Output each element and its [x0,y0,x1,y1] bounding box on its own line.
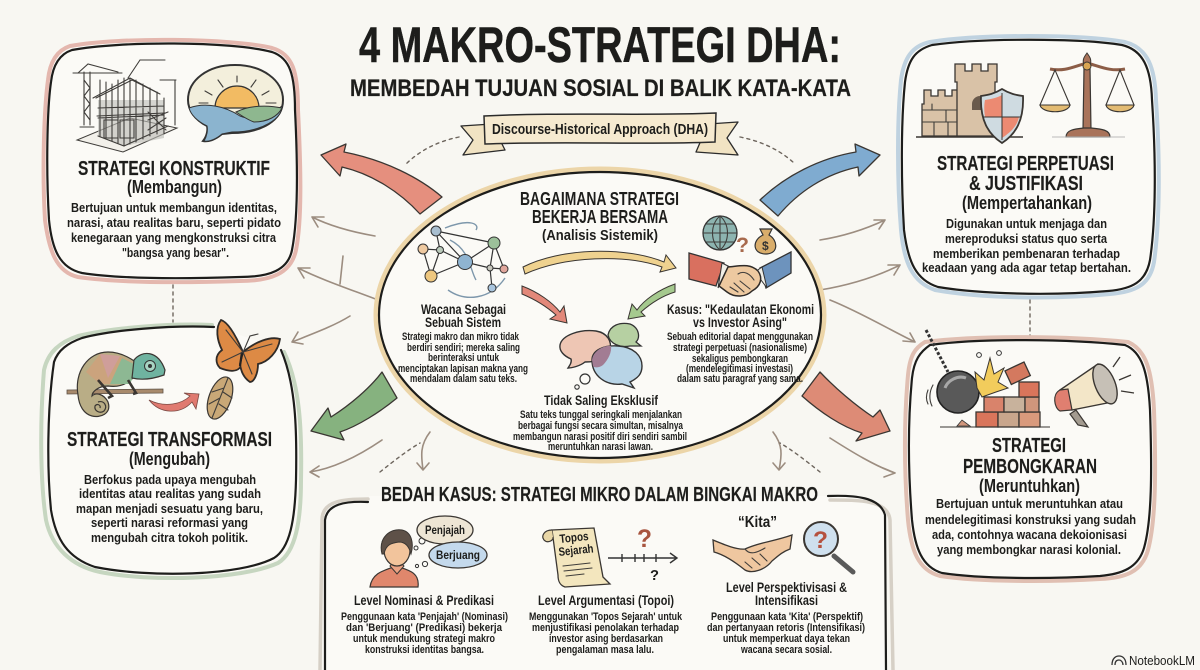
title: 4 MAKRO-STRATEGI DHA: [359,17,841,73]
icon: timeline with question marks: ? [637,525,652,553]
text: Level Nominasi dan Predikasi [341,592,508,656]
icon: chameleon on a branch [67,352,165,416]
heading: Strategi Perpetuasi: (Mempertahankan) [962,193,1092,213]
text: Tidak Saling Eksklusif [513,392,687,453]
icon: timeline with question marks: ? [650,567,659,584]
icon: wrecking ball [926,330,979,413]
text: Tidak Saling Eksklusif: membangun narasi positif diri sendiri sambil [513,431,687,443]
banner: Discourse-Historical Approach [461,113,738,155]
text: Pembongkaran description: mendelegitimasi konstruksi yang sudah [925,512,1136,527]
text: Level Perspektivisasi dan Intensifikasi: Level Perspektivisasi & [726,579,847,595]
icon: castle with shield [916,64,1023,143]
heading: Strategi Perpetuasi: STRATEGI PERPETUASI [937,153,1114,175]
icon: magnifier with question mark: ? [813,527,828,554]
text: Kasus Kedaulatan Ekonomi: Sebuah editorial dapat menggunakan [667,331,813,343]
heading: Strategi Konstruktif: (Membangun) [127,177,222,197]
icon: handshake over business cuffs [689,252,791,296]
heading: Strategi Transformasi: STRATEGI TRANSFORMASI [67,429,272,451]
icon: speech bubble with sunrise [188,65,283,141]
arrow: red to bubbles [522,286,567,323]
text: Perpetuasi description: memberikan pembenaran terhadap [933,246,1120,261]
text: Konstruktif description: narasi, atau realitas baru, seperti pidato [67,215,281,230]
title: MEMBEDAH TUJUAN SOSIAL DI BALIK KATA-KATA [350,75,851,102]
text: Level Argumentasi: menjustifikasi penolakan terhadap [532,622,679,634]
text: Level Nominasi dan Predikasi: dan 'Berjuang' (Predikasi) bekerja [346,622,503,634]
icon: scroll Topos Sejarah [543,528,610,587]
panel: Strategi Perpetuasi dan Justifikasi [898,36,1159,297]
text: Level Argumentasi: investor asing berdasarkan [549,633,663,645]
heading: Strategi Perpetuasi [937,153,1114,213]
text: Kasus Kedaulatan Ekonomi: Kasus: "Kedaulatan Ekonomi [667,301,814,317]
text: Kasus Kedaulatan Ekonomi [667,301,814,385]
icon: magnifier with question mark [804,522,853,572]
text: Pembongkaran description: yang membongkar narasi kolonial. [937,542,1121,557]
text: Perpetuasi description: mereproduksi status quo serta [945,231,1108,246]
icon: handshake with Kita: “Kita” [738,514,777,531]
text: Perpetuasi description: Digunakan untuk menjaga dan [946,216,1107,231]
text: Level Argumentasi [529,592,683,656]
text: Konstruktif description [67,200,281,260]
text: Level Perspektivisasi dan Intensifikasi: dan pertanyaan retoris (Intensifikasi) [707,622,865,634]
icon: megaphone [1055,357,1134,427]
text: Level Argumentasi: pengalaman masa lalu. [556,644,654,656]
text: Kasus Kedaulatan Ekonomi: vs Investor Asing" [693,314,787,330]
text: Pembongkaran description: Bertujuan untuk meruntuhkan atau [936,496,1123,511]
text: Wacana Sebagai Sebuah Sistem: Strategi makro dan mikro tidak [402,331,520,343]
heading: Strategi Transformasi [67,429,272,469]
panel: central ellipse, how strategies work together [376,169,824,461]
text: Level Perspektivisasi dan Intensifikasi [707,579,865,656]
heading: Strategi Konstruktif [78,158,270,197]
arrow: to Strategi Transformasi [311,372,397,440]
text: Level Nominasi dan Predikasi: Penggunaan kata 'Penjajah' (Nominasi) [341,611,508,623]
text: Level Nominasi dan Predikasi: untuk mendukung strategi makro [353,633,495,645]
icon: overlapping speech bubbles [560,323,642,389]
heading: Strategi Perpetuasi: & JUSTIFIKASI [969,173,1083,195]
icon: globe, question mark, money bag [703,216,776,257]
text: Transformasi description: identitas atau realitas yang sudah [79,486,261,501]
text: Transformasi description: Berfokus pada upaya mengubah [84,472,256,487]
panel: Strategi Konstruktif [44,40,300,282]
text: Level Argumentasi: Menggunakan 'Topos Sejarah' untuk [529,611,683,623]
icon: globe, question mark, money bag: ? [736,234,749,257]
icon: thought clouds Penjajah and Berjuang: Berjuang [436,548,480,562]
text: Konstruktif description: kenegaraan yang mengkonstruksi citra [71,230,277,245]
text: Wacana Sebagai Sebuah Sistem [398,301,528,385]
icon: balance scales [1040,53,1134,137]
icon: handshake with Kita [713,514,792,572]
arrow: to Strategi Perpetuasi [760,144,880,216]
arrow: green to bubbles [628,284,675,319]
heading: Strategi Pembongkaran: STRATEGI [992,435,1066,457]
text: Tidak Saling Eksklusif: Satu teks tunggal seringkali menjalankan [520,409,682,421]
heading: Strategi Pembongkaran: (Meruntuhkan) [979,476,1080,496]
icon: thought clouds Penjajah and Berjuang [417,516,487,568]
icon: timeline with question marks [608,525,677,584]
text: Tidak Saling Eksklusif: meruntuhkan narasi lawan. [548,441,653,453]
icon: scroll Topos Sejarah: Topos [559,529,589,546]
panel: Strategi Transformasi [41,320,301,578]
heading: Bagaimana Strategi Bekerja Bersama: BEKERJA BERSAMA [532,207,668,227]
text: Wacana Sebagai Sebuah Sistem: berdiri sendiri; mereka saling [407,342,520,354]
text: Kasus Kedaulatan Ekonomi: sekaligus pembongkaran [692,353,788,365]
text: Perpetuasi description [922,216,1131,275]
text: Level Perspektivisasi dan Intensifikasi: untuk memperkuat daya tekan [723,633,850,645]
text: Konstruktif description: Bertujuan untuk membangun identitas, [71,200,277,215]
heading: Bagaimana Strategi Bekerja Bersama: (Analisis Sistemik) [542,227,658,244]
icon: cocoon [202,374,238,422]
panel: Strategi Pembongkaran [905,330,1155,581]
text: Transformasi description [76,472,263,545]
text: Level Argumentasi: Level Argumentasi (Topoi) [538,592,674,608]
text: Tidak Saling Eksklusif: berbagai fungsi secara simultan, misalnya [518,420,684,432]
text: Wacana Sebagai Sebuah Sistem: mendalam dalam satu teks. [410,373,517,385]
icon: scroll Topos Sejarah: Sejarah [558,541,594,559]
arrow: to Strategi Pembongkaran [802,372,890,441]
text: Level Nominasi dan Predikasi: Level Nominasi & Predikasi [354,592,494,608]
icon: thought clouds Penjajah and Berjuang: Penjajah [425,523,465,537]
heading: Strategi Transformasi: (Mengubah) [129,449,210,469]
arrow: yellow from system to case [523,251,676,274]
arrow: to Strategi Konstruktif [321,144,442,214]
icon: building under construction sketch [73,60,177,152]
text: Level Perspektivisasi dan Intensifikasi: Intensifikasi [755,592,818,608]
text: Level Nominasi dan Predikasi: konstruksi identitas bangsa. [365,644,484,656]
text: Kasus Kedaulatan Ekonomi: (mendelegitimasi investasi) [686,363,793,375]
icon: red curved arrow [149,393,199,411]
text: Pembongkaran description [925,496,1136,557]
heading: Bagaimana Strategi Bekerja Bersama: BAGAIMANA STRATEGI [520,189,679,209]
text: Konstruktif description: "bangsa yang besar". [122,245,229,260]
thin connecting arrows [292,217,915,477]
text: Pembongkaran description: ada, contohnya wacana dekoionisasi [932,527,1127,542]
icon: network of nodes [418,223,508,297]
text: Perpetuasi description: keadaan yang ada agar tetap bertahan. [922,260,1131,275]
text: Tidak Saling Eksklusif: Tidak Saling Eksklusif [544,392,658,408]
text: Kasus Kedaulatan Ekonomi: strategi perpetuasi (nasionalisme) [673,342,807,354]
text: Level Perspektivisasi dan Intensifikasi: wacana secara sosial. [740,644,832,656]
text: Kasus Kedaulatan Ekonomi: dalam satu paragraf yang sama. [677,373,803,385]
panel: Bedah Kasus case study [320,484,893,670]
heading: Bagaimana Strategi Bekerja Bersama [520,189,679,244]
text: Level Perspektivisasi dan Intensifikasi: Penggunaan kata 'Kita' (Perspektif) [711,611,863,623]
text: Wacana Sebagai Sebuah Sistem: menciptakan lapisan makna yang [398,363,528,375]
heading: Strategi Pembongkaran: PEMBONGKARAN [963,456,1097,478]
heading: Strategi Pembongkaran [963,435,1097,496]
text: Transformasi description: mengubah citra tokoh politik. [91,530,248,545]
icon: butterfly [216,320,280,382]
icon: person thinking [370,530,428,587]
icon: brick wall with impact burst [940,351,1050,427]
heading: Bedah Kasus: BEDAH KASUS: STRATEGI MIKRO DALAM BINGKAI MAKRO [381,484,818,506]
title [350,17,851,102]
text: Transformasi description: mapan menjadi sesuatu yang baru, [76,501,263,516]
banner: Discourse-Historical Approach: Discourse-Historical Approach (DHA) [492,121,708,138]
text: Wacana Sebagai Sebuah Sistem: Sebuah Sistem [425,314,501,330]
text: Transformasi description: seperti narasi reformasi yang [91,515,248,530]
text: Wacana Sebagai Sebuah Sistem: Wacana Sebagai [421,301,506,317]
text: Wacana Sebagai Sebuah Sistem: berinteraksi untuk [428,352,500,364]
icon: globe, question mark, money bag: $ [762,239,769,253]
heading: Strategi Konstruktif: STRATEGI KONSTRUKTIF [78,158,270,180]
